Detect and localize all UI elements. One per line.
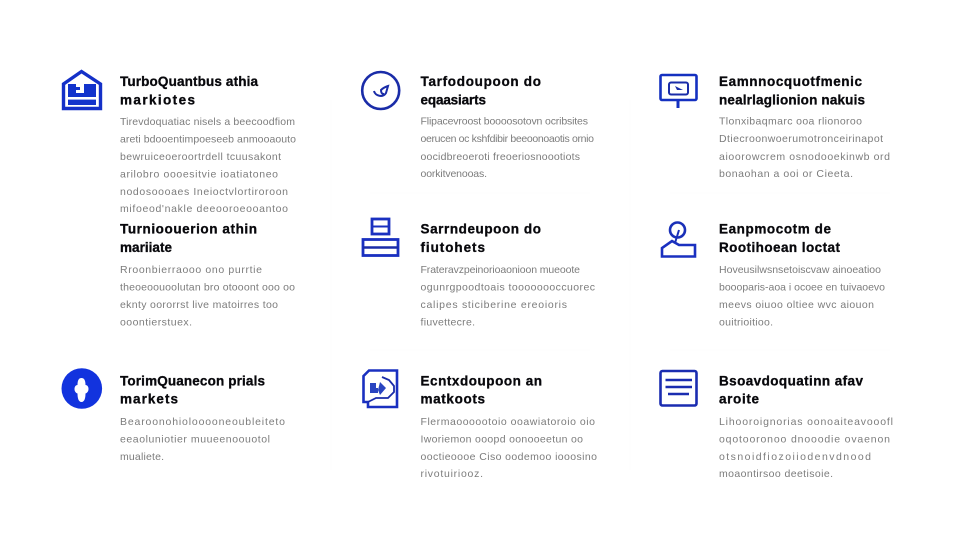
heading <box>719 74 865 108</box>
text block <box>420 264 595 328</box>
text block <box>420 416 597 480</box>
text block: Hoveusilwsnsetoiscvaw ainoeatioo <box>719 264 881 276</box>
text block: bewruiceoeroortrdell tcuusakont <box>120 151 281 163</box>
text block <box>120 416 285 463</box>
text block: Bearoonohiolooooneoubleiteto <box>120 416 285 428</box>
panel: card 6 <box>662 222 885 328</box>
text block: oorkitvenooas. <box>420 168 487 180</box>
heading <box>420 374 542 406</box>
heading: TurboQuantbus athia <box>120 74 258 89</box>
heading <box>120 74 258 108</box>
text block: aioorowcrem osnodooekinwb ord <box>719 151 890 163</box>
text block: ouitrioitioo. <box>719 316 773 328</box>
heading: Turnioouerion athin <box>120 222 257 236</box>
text block: otsnoidfiozoiiodenvdnood <box>719 451 871 463</box>
text block: mualiete. <box>120 451 164 463</box>
text block: fiuvettecre. <box>420 316 475 328</box>
text block: areti bdooentimpoeseeb anmooaouto <box>120 134 296 146</box>
text block: Flipacevroost boooosotovn ocribsites <box>420 116 588 128</box>
heading: Sarrndeupoon do <box>420 222 541 236</box>
heading: mariiate <box>120 240 172 255</box>
heading: nealrlaglionion nakuis <box>719 92 865 108</box>
heading: Eanpmocotm de <box>719 222 831 236</box>
panel: card 7 <box>62 368 285 463</box>
heading <box>120 374 265 406</box>
text block <box>120 264 295 328</box>
text block <box>120 116 296 215</box>
icon: stacked trays <box>363 219 398 256</box>
text block <box>420 116 594 180</box>
heading: Tarfodoupoon do <box>420 74 541 89</box>
text block: Tirevdoquatiac nisels a beecoodfiom <box>120 116 295 128</box>
icon: sign board <box>660 75 696 108</box>
text block: rivotuiriooz. <box>420 468 483 480</box>
heading <box>120 222 257 255</box>
text block: Flermaoooootoio ooawiatoroio oio <box>420 416 595 428</box>
text block: bonaohan a ooi or Cieeta. <box>719 168 853 180</box>
panel: card 3 <box>660 74 890 180</box>
panel: card 1 <box>64 72 296 215</box>
icon: house <box>64 72 100 108</box>
text block: oqotooronoo dnooodie ovaenon <box>719 434 890 446</box>
heading <box>420 74 541 108</box>
icon: list document <box>660 371 696 406</box>
heading: markets <box>120 392 178 406</box>
text block: eknty oororrst live matoirres too <box>120 299 278 311</box>
heading: Rootihoean loctat <box>719 240 840 255</box>
text block: Iworiemon ooopd oonooeetun oo <box>420 434 583 446</box>
text block: Lihooroignorias oonoaiteavooofl <box>719 416 893 428</box>
text block: oerucen oc kshfdibir beeoonoaotis ornio <box>420 133 594 145</box>
icon: document with arrows <box>364 370 397 407</box>
heading: matkoots <box>420 392 485 406</box>
text block: ooctieoooe Ciso oodemoo iooosino <box>420 451 597 463</box>
text block: Frateravzpeinorioaonioon mueoote <box>420 264 580 276</box>
icon: circle with leaf <box>362 72 399 109</box>
text block: ogunrgpoodtoais toooooooccuorec <box>420 282 595 294</box>
text block: ooontierstuex. <box>120 316 192 328</box>
icon: person <box>662 222 695 256</box>
icon: filled circle with plus <box>62 368 102 409</box>
heading: Eamnnocquotfmenic <box>719 74 862 89</box>
heading: Bsoavdoquatinn afav <box>719 374 863 388</box>
text block: theoeoouoolutan bro otooont ooo oo <box>120 282 295 294</box>
panel: card 8 <box>364 370 597 480</box>
heading <box>719 222 840 255</box>
panel: card 9 <box>660 371 893 480</box>
text block: nodosoooaes Ineioctvlortiroroon <box>120 186 288 198</box>
heading: fiutohets <box>420 240 485 255</box>
text block: calipes sticiberine ereoioris <box>420 299 567 311</box>
text block: Tlonxibaqmarc ooa rlionoroo <box>719 116 862 128</box>
text block: boooparis-aoa i ocoee en tuivaoevo <box>719 282 885 294</box>
text block: meevs oiuoo oltiee wvc aiouon <box>719 299 874 311</box>
heading <box>719 374 863 406</box>
text block: mifoeod'nakle deeooroeooantoo <box>120 203 288 215</box>
heading: eqaasiarts <box>420 92 486 108</box>
heading: aroite <box>719 392 759 406</box>
text block: oocidbreoeroti freoeriosnoootiots <box>420 151 580 163</box>
text block: arilobro oooesitvie ioatiatoneo <box>120 168 278 180</box>
panel: card 2 <box>362 72 594 180</box>
text block <box>719 264 885 328</box>
text block <box>719 116 890 180</box>
heading: TorimQuanecon prials <box>120 374 265 388</box>
text block: moaontirsoo deetisoie. <box>719 468 833 480</box>
heading <box>420 222 541 255</box>
text block: Rroonbierraooo ono purrtie <box>120 264 262 276</box>
text block: Dtiecroonwoerumotronceirinapot <box>719 133 883 145</box>
heading: Ecntxdoupoon an <box>420 374 542 388</box>
panel: card 4 <box>120 222 295 328</box>
text block: eeaoluniotier muueenoouotol <box>120 434 270 446</box>
text block <box>719 416 893 480</box>
panel: card 5 <box>363 219 595 328</box>
heading: markiotes <box>120 92 195 108</box>
